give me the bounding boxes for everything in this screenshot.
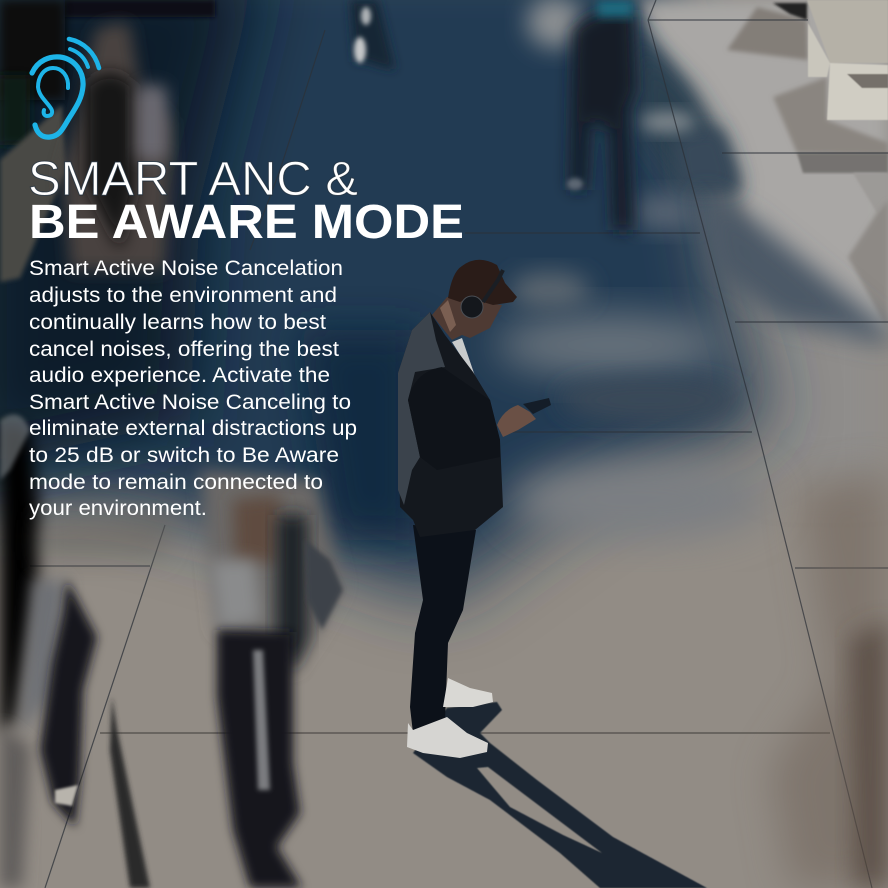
blurred passer-by, bottom centre xyxy=(200,470,343,888)
body text block: cancel noises, offering the best xyxy=(29,337,339,361)
neck and face xyxy=(432,297,502,340)
body text block: your environment. xyxy=(29,496,207,520)
neck highlight xyxy=(440,300,456,332)
blurred passer-by, bottom left xyxy=(0,414,180,888)
t-shirt xyxy=(452,338,477,382)
jacket lit shoulder xyxy=(398,312,445,505)
dark wall and planter, top left xyxy=(0,0,215,282)
icon: ear with sound waves xyxy=(32,39,99,137)
body text block: mode to remain connected to xyxy=(29,470,323,494)
blurred passer-by, top centre xyxy=(527,0,636,230)
phone xyxy=(523,398,551,414)
man's cast shadow xyxy=(413,702,707,888)
man with headphones looking at phone xyxy=(398,260,551,758)
blurred passer-by, top small xyxy=(350,0,395,70)
sleeve xyxy=(408,367,500,470)
jacket xyxy=(398,312,503,537)
sunlit pavement and soft shadows, upper right xyxy=(633,0,888,345)
body text block: eliminate external distractions up xyxy=(29,416,357,440)
title: BE AWARE MODE xyxy=(29,196,464,249)
body text block: audio experience. Activate the xyxy=(29,363,330,387)
hand xyxy=(497,405,536,437)
stone bench xyxy=(807,0,888,120)
back shoe xyxy=(443,678,493,707)
body text block xyxy=(29,256,357,520)
headphone cup and band xyxy=(483,270,503,302)
front shoe xyxy=(407,717,488,758)
body text block: Smart Active Noise Canceling to xyxy=(29,390,351,414)
body text block: adjusts to the environment and xyxy=(29,283,337,307)
trousers xyxy=(410,525,476,733)
body text block: continually learns how to best xyxy=(29,310,326,334)
hair xyxy=(448,260,517,305)
title xyxy=(28,153,464,249)
blurred passer-by, bottom right xyxy=(770,470,888,888)
body text block: Smart Active Noise Cancelation xyxy=(29,256,343,280)
title: SMART ANC & xyxy=(28,153,358,206)
body text block: to 25 dB or switch to Be Aware xyxy=(29,443,339,467)
blurred passer-by, top left xyxy=(62,23,172,270)
